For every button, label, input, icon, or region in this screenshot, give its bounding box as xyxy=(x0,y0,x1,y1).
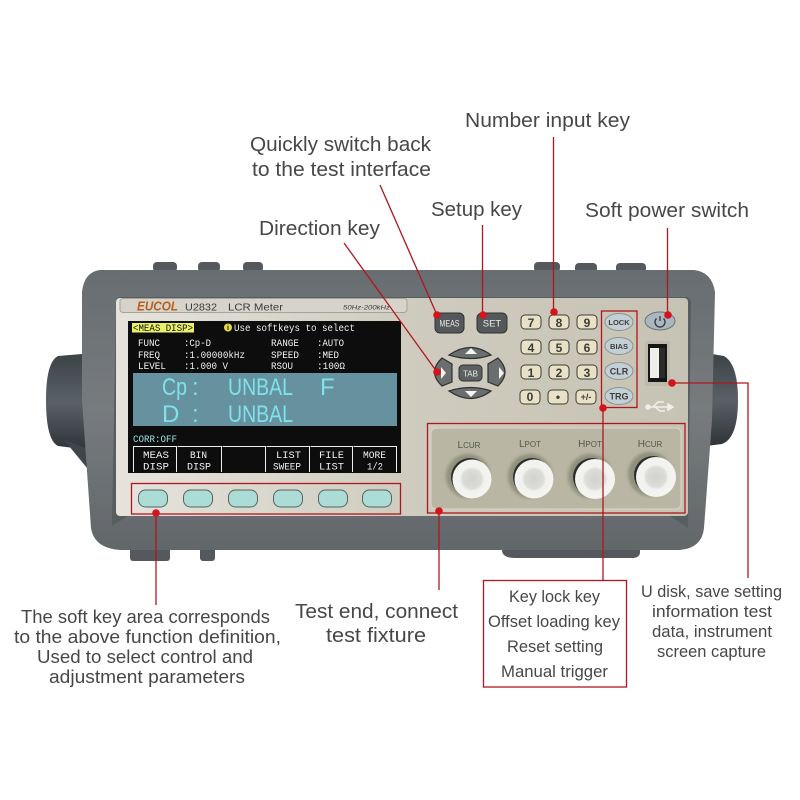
function keys: CLR xyxy=(610,366,629,376)
LCD screen: BIN xyxy=(190,450,207,462)
connector panel xyxy=(431,428,681,509)
LCD screen: SPEED xyxy=(271,350,299,362)
label: number input key: Number input key xyxy=(465,109,631,132)
label: soft key area xyxy=(14,606,281,687)
LCD screen: : xyxy=(192,374,199,401)
LCD screen: : xyxy=(192,401,199,428)
label: soft key area: Used to select control and xyxy=(37,646,253,667)
number keypad: 0 xyxy=(527,390,534,404)
LCD screen: DISP xyxy=(187,462,211,474)
LCD screen: UNBAL xyxy=(228,374,293,401)
label box: function keys: Offset loading key xyxy=(488,613,621,631)
number keypad: +/- xyxy=(581,392,591,402)
callout lines and markers xyxy=(132,137,748,687)
LCD screen: :1.000 V xyxy=(184,361,229,373)
USB port xyxy=(645,341,670,386)
number keypad: 5 xyxy=(556,341,563,355)
LCD screen: Cp xyxy=(162,374,187,401)
label: U disk xyxy=(641,583,782,661)
LCD screen: SWEEP xyxy=(273,462,301,474)
LCD screen: Use softkeys to select xyxy=(234,323,355,335)
number keypad: 4 xyxy=(528,341,535,355)
beige front panel xyxy=(112,297,691,528)
label: setup key: Setup key xyxy=(431,198,523,221)
number keypad: • xyxy=(556,390,560,404)
LCD screen: LIST xyxy=(276,450,301,462)
LCD screen: FUNC xyxy=(138,338,160,350)
label: test end: Test end, connect xyxy=(295,600,458,623)
brand strip: 50Hz-200kHz xyxy=(343,304,391,312)
label: direction key: Direction key xyxy=(259,217,381,240)
LCD screen: UNBAL xyxy=(228,401,293,428)
MEAS and SET keys: SET xyxy=(483,318,501,330)
label: quickly switch back: Quickly switch back xyxy=(250,133,432,156)
connector panel: HPOT xyxy=(578,439,602,450)
label box: function keys: Reset setting xyxy=(507,638,603,656)
connector panel: LCUR xyxy=(458,440,481,451)
LCD screen: D xyxy=(162,401,179,428)
connector panel: HCUR xyxy=(638,439,662,450)
LCD screen: <MEAS DISP> xyxy=(133,323,193,335)
MEAS and SET keys: MEAS xyxy=(440,318,460,330)
number keypad: 2 xyxy=(556,366,563,380)
LCD screen: :100Ω xyxy=(317,361,345,373)
USB symbol xyxy=(646,402,673,411)
number keypad: 1 xyxy=(528,366,535,380)
grey housing xyxy=(82,270,715,550)
brand strip: LCR Meter xyxy=(228,302,284,314)
label: test end: test fixture xyxy=(326,624,426,647)
number keypad: 7 xyxy=(528,316,535,330)
label: U disk: screen capture xyxy=(657,643,766,661)
number keypad xyxy=(520,315,597,404)
number keypad: 6 xyxy=(584,341,591,355)
LCD screen: i xyxy=(227,325,229,332)
MEAS and SET keys xyxy=(435,313,507,333)
label: U disk: information test xyxy=(652,603,772,621)
label box: function keys: Key lock key xyxy=(509,588,601,606)
label: soft power switch: Soft power switch xyxy=(585,199,749,222)
function keys: BIAS xyxy=(610,342,628,351)
label box: function keys xyxy=(488,588,621,681)
LCD screen: FREQ xyxy=(138,350,160,362)
number keypad: 9 xyxy=(584,316,591,330)
power key xyxy=(645,312,675,330)
LCD screen: 1/2 xyxy=(367,462,383,474)
label box: function keys: Manual trigger xyxy=(501,663,608,681)
brand strip: EUCOL xyxy=(137,298,178,314)
LCD screen: CORR:OFF xyxy=(133,434,177,446)
top and bottom feet xyxy=(130,262,646,561)
label: U disk: data, instrument xyxy=(652,623,772,641)
number keypad: 3 xyxy=(584,366,591,380)
label: soft key area: adjustment parameters xyxy=(49,666,245,687)
label: soft key area: to the above function definition, xyxy=(14,626,281,647)
LCD screen: :AUTO xyxy=(317,338,344,350)
LCD screen: FILE xyxy=(319,450,344,462)
LCD screen: LEVEL xyxy=(138,361,166,373)
brand strip: U2832 xyxy=(185,302,217,314)
label: quickly switch back: to the test interface xyxy=(252,158,431,181)
number keypad: 8 xyxy=(556,316,563,330)
LCD screen: RSOU xyxy=(271,361,293,373)
label: test end xyxy=(295,600,458,647)
instrument: LCR meter xyxy=(46,262,738,561)
label: quickly switch back xyxy=(250,133,432,181)
LCD screen: MORE xyxy=(363,450,386,462)
LCD screen: LIST xyxy=(319,462,344,474)
label: U disk: U disk, save setting xyxy=(641,583,782,601)
connector panel: LPOT xyxy=(519,439,541,450)
LCD screen: :MED xyxy=(317,350,339,362)
LCD screen: F xyxy=(320,374,335,401)
function keys xyxy=(605,314,633,404)
LCD screen xyxy=(128,321,401,474)
function keys: TRG xyxy=(610,392,628,402)
LCD screen: :1.00000kHz xyxy=(184,350,245,362)
LCD screen: :Cp-D xyxy=(184,338,211,350)
brand strip xyxy=(120,298,407,314)
soft keys xyxy=(138,490,392,507)
function keys: LOCK xyxy=(608,318,630,327)
direction keys xyxy=(434,348,505,398)
LCD screen: DISP xyxy=(143,462,169,474)
direction keys: TAB xyxy=(463,370,478,378)
LCD screen: MEAS xyxy=(143,450,169,462)
side knobs xyxy=(46,354,738,474)
LCD screen: RANGE xyxy=(271,338,299,350)
label: soft key area: The soft key area corresponds xyxy=(21,606,270,627)
